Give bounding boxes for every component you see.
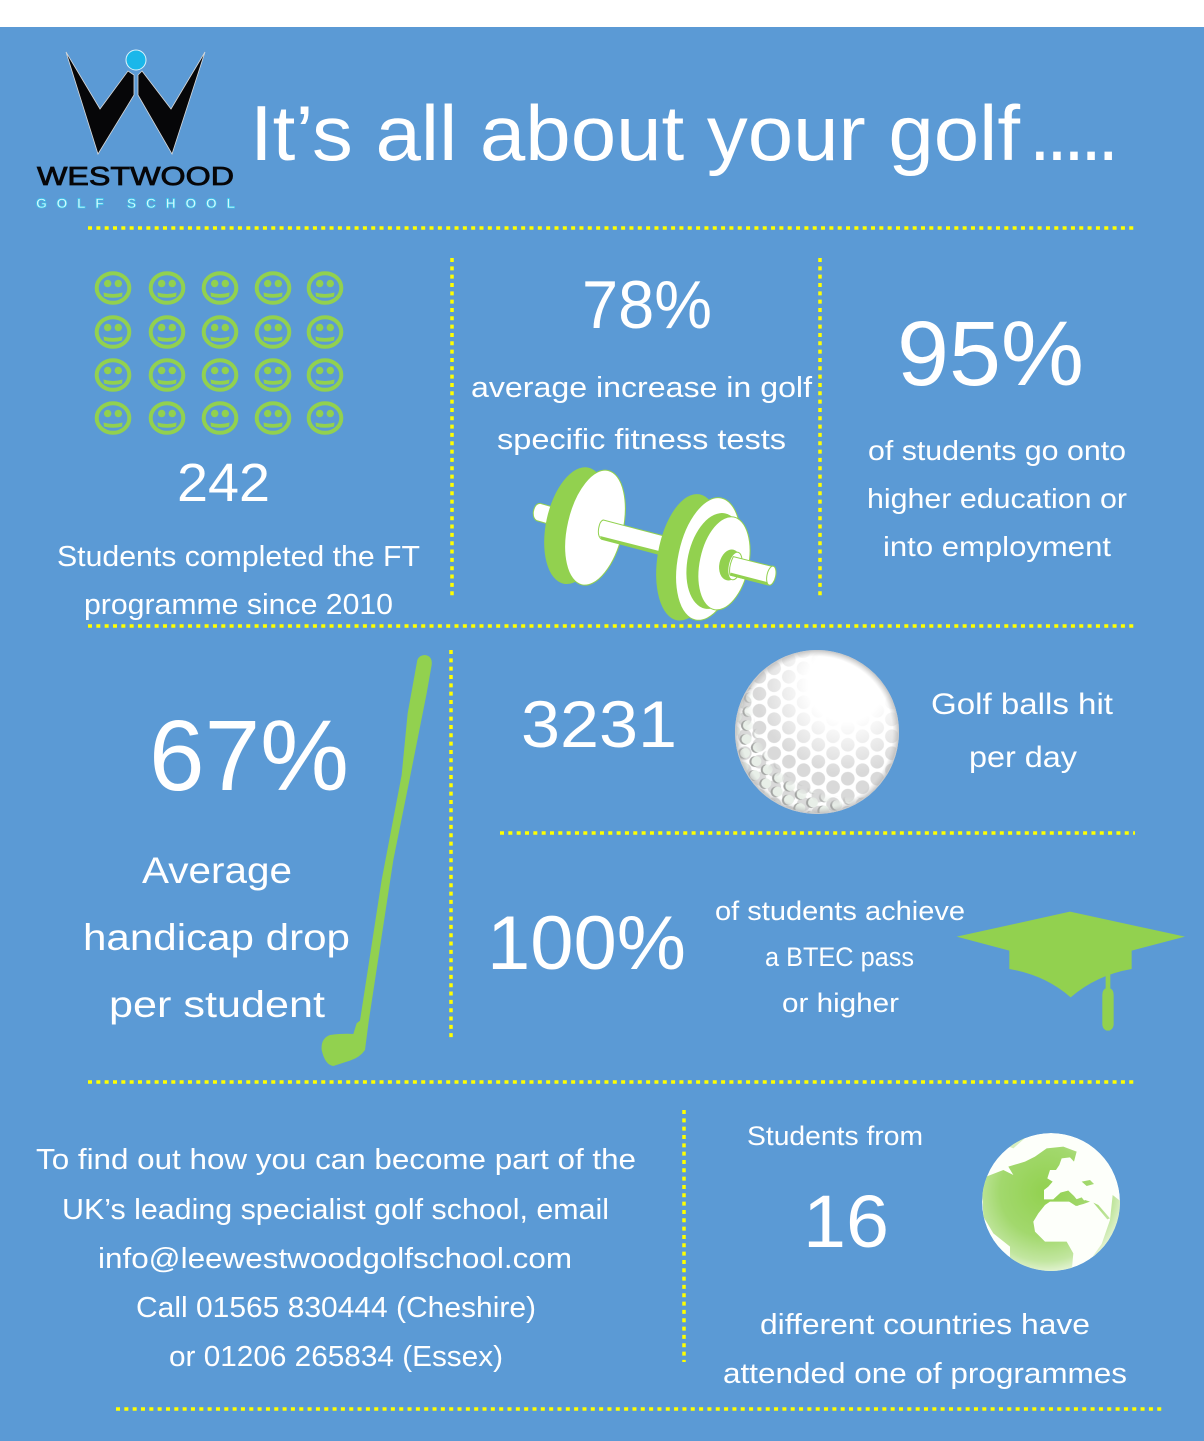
caption: higher education: higher education or <box>867 483 1127 514</box>
panel: golf balls hit <box>521 650 1114 814</box>
caption: handicap drop: handicap drop <box>83 917 350 958</box>
caption: BTEC: or higher <box>782 988 899 1018</box>
panel: BTEC pass <box>487 896 1185 1031</box>
caption: students completed: programme since 2010 <box>84 589 393 621</box>
icon: graduation cap <box>957 912 1185 1031</box>
caption: handicap drop: Average <box>142 850 292 891</box>
contact line 2: UK’s leading specialist golf school, email <box>62 1194 609 1226</box>
panel: fitness increase <box>471 267 813 626</box>
caption: BTEC: a BTEC pass <box>765 942 914 972</box>
icon: dumbbell <box>533 461 778 626</box>
panel: higher education <box>867 303 1127 562</box>
panel: contact <box>36 1144 636 1373</box>
caption: fitness tests <box>471 372 813 456</box>
caption: higher education <box>867 435 1127 562</box>
caption: fitness tests: average increase in golf <box>471 372 813 404</box>
number: 3231: 3231 <box>521 687 677 761</box>
caption: students completed: Students completed the FT <box>57 541 420 573</box>
caption: golf balls: per day <box>969 741 1077 774</box>
number: 16: 16 <box>803 1180 889 1263</box>
caption: students completed <box>57 541 420 621</box>
caption: different countries <box>723 1309 1127 1390</box>
contact email: info@leewestwoodgolfschool.com <box>98 1243 572 1275</box>
number: 95%: 95% <box>897 303 1084 405</box>
title: It’s all about your golf <box>250 89 1020 177</box>
contact phone Cheshire: Call 01565 830444 (Cheshire) <box>136 1292 536 1324</box>
number: 242: 242 <box>177 453 270 513</box>
caption: golf balls: Golf balls hit <box>931 688 1114 721</box>
caption: different countries: different countries have <box>760 1309 1090 1341</box>
panel: students completed <box>57 273 420 621</box>
caption: fitness tests: specific fitness tests <box>497 424 786 456</box>
icon: golf club <box>322 655 432 1066</box>
caption: BTEC <box>715 896 965 1018</box>
number: 100%: 100% <box>487 901 686 986</box>
icon: smiley grid <box>97 273 341 433</box>
caption: handicap drop: per student <box>109 984 326 1025</box>
caption: handicap drop <box>83 850 350 1025</box>
caption: higher education: into employment <box>883 531 1111 562</box>
logo: Westwood Golf School <box>36 50 235 211</box>
caption: students from: Students from <box>747 1121 923 1151</box>
title: ..... <box>1029 89 1119 177</box>
caption: higher education: of students go onto <box>868 435 1126 466</box>
contact phone Essex: or 01206 265834 (Essex) <box>169 1341 503 1373</box>
caption: BTEC: of students achieve <box>715 896 965 926</box>
panel: countries <box>723 1121 1127 1390</box>
caption: different countries: attended one of programmes <box>723 1358 1127 1390</box>
panel: handicap drop <box>83 655 432 1066</box>
number: 67%: 67% <box>149 700 349 812</box>
number: 78%: 78% <box>582 267 712 343</box>
icon: golf ball <box>735 650 899 814</box>
logo W mark <box>66 52 205 154</box>
logo subtitle: GOLF SCHOOL <box>36 195 235 211</box>
caption: golf balls <box>931 688 1114 774</box>
logo wordmark: WESTWOOD <box>37 161 234 191</box>
icon: globe <box>982 1133 1123 1272</box>
logo ball <box>126 50 146 70</box>
contact line 1: To find out how you can become part of the <box>36 1144 636 1176</box>
